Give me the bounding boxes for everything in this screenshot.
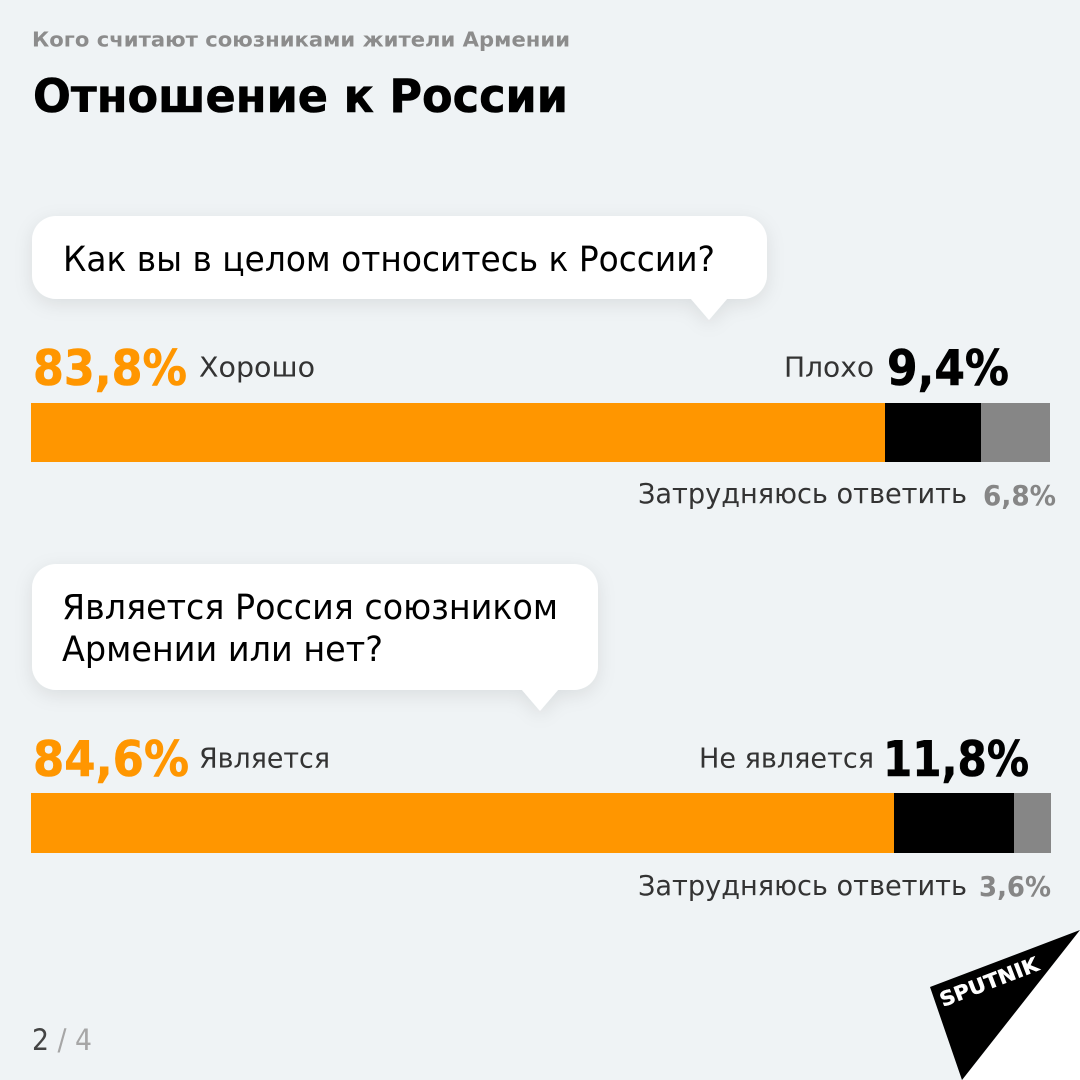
question 2 text: Является Россия союзником — [62, 588, 558, 628]
question 2 text — [62, 588, 558, 670]
stacked bar 2 — [31, 793, 1051, 853]
page counter: 2 / 4 — [32, 1023, 92, 1057]
panel: question 1 — [31, 216, 1056, 512]
label: Затрудняюсь ответить: Затрудняюсь ответить — [638, 869, 967, 902]
value: 3,6%: 3,6% — [979, 870, 1051, 903]
label: Не является: Не является — [699, 742, 874, 774]
logo: Sputnik: SPUTNIK — [936, 951, 1043, 1012]
question 2 text: Армении или нет? — [62, 630, 383, 670]
value: 9,4%: 9,4% — [887, 340, 1009, 397]
label: Является: Является — [199, 742, 330, 774]
value: 83,8%: 83,8% — [33, 340, 187, 397]
label: Хорошо: Хорошо — [199, 350, 315, 384]
speech bubble 2 — [32, 564, 598, 711]
stacked bar 1 — [31, 403, 1050, 462]
value: 6,8%: 6,8% — [983, 479, 1056, 512]
speech bubble 1 — [32, 216, 767, 320]
question 1 text: Как вы в целом относитесь к России? — [63, 240, 715, 280]
subtitle: Кого считают союзниками жители Армении — [32, 28, 570, 52]
logo: Sputnik — [930, 930, 1080, 1080]
title: Отношение к России — [33, 69, 568, 123]
value: 84,6%: 84,6% — [33, 731, 189, 788]
label: Затрудняюсь ответить: Затрудняюсь ответить — [638, 477, 967, 510]
label: Плохо: Плохо — [784, 350, 874, 384]
panel: question 2 — [31, 564, 1051, 903]
value: 11,8%: 11,8% — [883, 731, 1029, 788]
